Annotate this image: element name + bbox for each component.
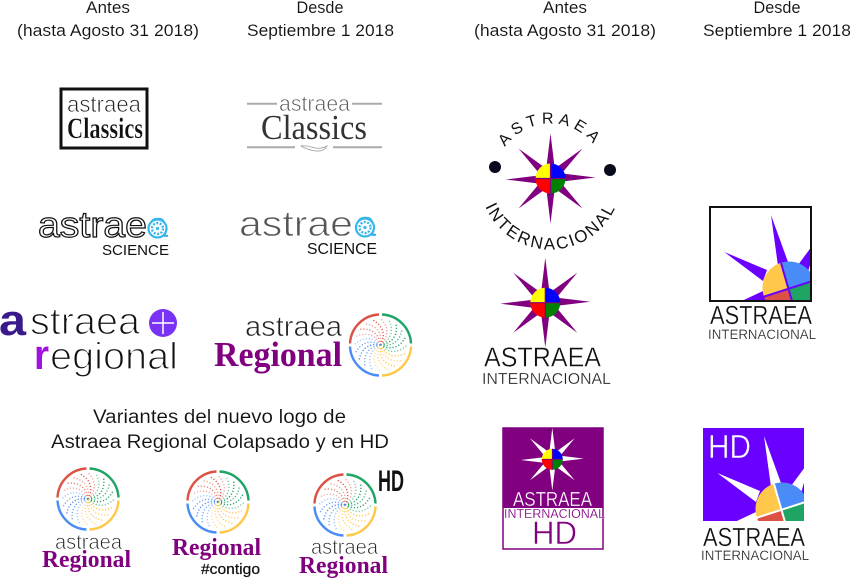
logo: astraea internacional HD old: ASTRAEA xyxy=(513,489,593,511)
logo: variant collapsed: Regional xyxy=(42,547,131,573)
icon: colour wheel xyxy=(350,314,411,376)
logo: astraea internacional new: INTERNACIONAL xyxy=(708,327,816,342)
logo: variant collapsed xyxy=(42,468,131,573)
logo: astraea classics old xyxy=(61,89,147,148)
logo: astraea internacional HD new: INTERNACIONAL xyxy=(701,548,809,563)
logo: astraea classics old: Classics xyxy=(67,112,143,145)
icon: plus circle xyxy=(149,309,177,337)
text block: variants caption xyxy=(51,407,389,453)
logo: astraea internacional round old: INTERNACIONAL xyxy=(486,202,615,250)
logo: astraea science new: a xyxy=(355,203,377,244)
icon: star xyxy=(500,258,590,348)
logo: astraea internacional HD new xyxy=(702,428,809,560)
logo: variant collapsed: astraea xyxy=(55,531,122,554)
logo: astraea science new: astrae xyxy=(239,203,353,244)
column headings xyxy=(17,0,850,40)
logo: astraea internacional HD old: INTERNACIONAL xyxy=(504,507,605,521)
logo: astraea regional new: astraea xyxy=(245,311,343,343)
logo: astraea classics old: astraea xyxy=(67,91,141,117)
icon: cropped star xyxy=(724,215,810,300)
logo: astraea internacional new: ASTRAEA xyxy=(710,300,813,330)
icon: star xyxy=(506,134,596,224)
logo: astraea internacional round old: ASTRAEA xyxy=(500,112,598,147)
logo: variant contigo: Regional xyxy=(172,535,261,561)
logo: astraea science old xyxy=(38,204,169,259)
logo: astraea regional old xyxy=(0,296,178,378)
logo: astraea classics new: Classics xyxy=(261,108,367,147)
logo: variant HD: HD xyxy=(378,465,404,498)
heading: desde column 4 xyxy=(703,0,850,40)
logo: astraea science new xyxy=(239,203,377,258)
logo: astraea science new: SCIENCE xyxy=(307,241,377,258)
logo: astraea classics new: astraea xyxy=(279,91,351,116)
text block: variants caption: Variantes del nuevo logo de xyxy=(93,407,346,428)
logo: variant contigo xyxy=(172,472,261,578)
heading: desde column 2 xyxy=(247,0,394,40)
logo: astraea regional new: Regional xyxy=(214,335,342,374)
logo: astraea internacional HD new: HD xyxy=(708,428,751,465)
logo: astraea classics new xyxy=(247,91,382,151)
logo: astraea internacional HD old xyxy=(503,428,605,551)
heading: antes column 1 xyxy=(17,0,199,40)
text block: variants caption: Astraea Regional Colapsado y en HD xyxy=(51,432,389,453)
logo: astraea regional new xyxy=(214,311,411,376)
logo: astraea internacional HD new: ASTRAEA xyxy=(703,522,806,552)
heading: antes column 1: (hasta Agosto 31 2018) xyxy=(17,21,199,40)
logo: astraea internacional round old xyxy=(486,112,616,250)
heading: desde column 2: Septiembre 1 2018 xyxy=(247,21,394,40)
logo: astraea internacional stacked old: INTERNACIONAL xyxy=(482,371,611,388)
heading: antes column 3: (hasta Agosto 31 2018) xyxy=(474,21,656,40)
heading: antes column 3 xyxy=(474,0,656,40)
logo: astraea internacional new xyxy=(709,206,816,339)
logo: astraea regional old: egional xyxy=(50,336,178,378)
logo: astraea internacional stacked old: ASTRAEA xyxy=(484,342,601,372)
logo: astraea internacional HD old: HD xyxy=(532,515,577,551)
logo: astraea science old: astrae xyxy=(38,204,147,245)
heading: desde column 4: Septiembre 1 2018 xyxy=(703,21,850,40)
logo: astraea regional old: r xyxy=(34,331,49,378)
logo: variant HD xyxy=(299,465,404,579)
logo: variant contigo: #contigo xyxy=(201,561,260,578)
logo: variant HD: astraea xyxy=(311,536,378,559)
logo: variant HD: Regional xyxy=(299,553,388,579)
logo: astraea internacional stacked old xyxy=(482,258,611,388)
icon: film wheel xyxy=(148,220,166,238)
logo: astraea science old: a xyxy=(148,204,169,245)
icon: cropped white star xyxy=(718,436,804,521)
logo: astraea regional old: straea xyxy=(30,301,141,343)
logo: astraea science old: SCIENCE xyxy=(102,242,169,259)
icon: film wheel xyxy=(356,218,374,236)
icon: white star xyxy=(521,428,584,491)
